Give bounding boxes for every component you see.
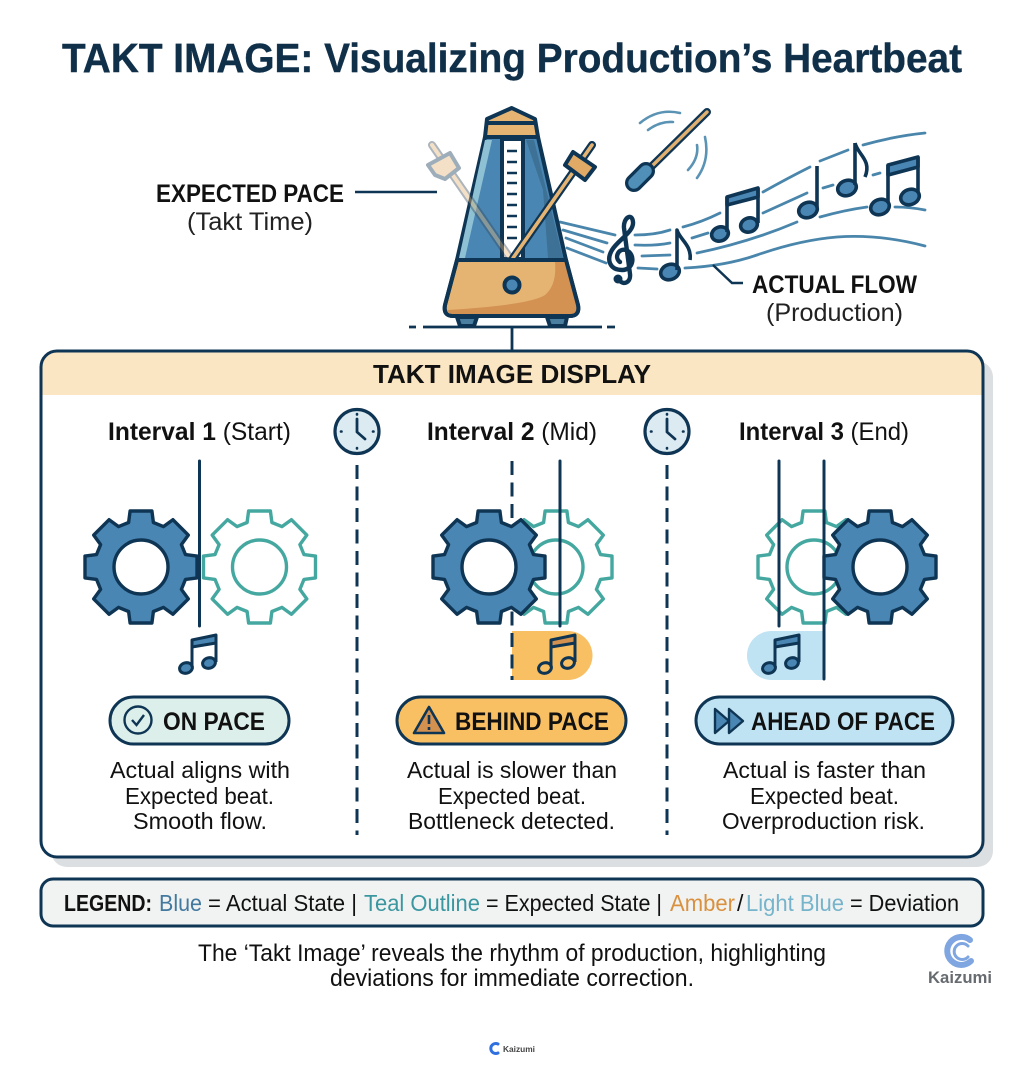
legend: Light Blue [746, 890, 844, 916]
description: Overproduction risk. [722, 808, 925, 834]
description [110, 757, 290, 834]
metronome base [445, 260, 578, 316]
deviation tab [512, 631, 592, 680]
metronome body [457, 137, 566, 260]
caption: deviations for immediate correction. [330, 965, 694, 992]
actual gear [824, 511, 936, 623]
metronome cap [485, 108, 538, 137]
description: Expected beat. [125, 783, 274, 809]
description: Smooth flow. [133, 808, 267, 834]
title: TAKT IMAGE: Visualizing Production’s Heartbeat [62, 35, 962, 81]
logo: Kaizumi watermark: Kaizumi [928, 968, 992, 987]
icon: conductor baton [634, 112, 707, 183]
heading: Interval 3 (End) [739, 418, 909, 446]
label: actual flow: ACTUAL FLOW [752, 271, 917, 299]
column: interval 1 [85, 418, 316, 834]
divider 1 with clock [335, 410, 379, 835]
description: Actual is slower than [407, 757, 617, 783]
label: expected pace: (Takt Time) [187, 208, 313, 236]
note 1 [659, 230, 690, 282]
actual gear [433, 511, 545, 623]
logo: Kaizumi footer: Kaizumi [503, 1044, 535, 1054]
metronome scale [502, 139, 523, 259]
column: interval 3 [696, 418, 953, 834]
divider 2 with clock [645, 410, 689, 835]
beat lines [779, 461, 824, 679]
logo: Kaizumi watermark [928, 937, 992, 987]
panel: takt image display [41, 351, 993, 867]
staff lines: actual flow wave [560, 133, 925, 269]
column: interval 2 [397, 418, 626, 834]
status pill [110, 697, 289, 744]
beat line [558, 461, 562, 626]
description: Actual is faster than [723, 757, 926, 783]
icon: metronome [428, 108, 595, 326]
label: actual flow: (Production) [766, 299, 903, 327]
heading: Interval 2 (Mid) [427, 418, 597, 446]
legend: Teal Outline [364, 890, 480, 916]
legend: = Deviation [850, 890, 959, 916]
note [178, 635, 217, 675]
description [407, 757, 617, 834]
note 4 [836, 143, 867, 198]
expected gear [758, 511, 870, 623]
panel header: TAKT IMAGE DISPLAY [373, 359, 651, 389]
ground line [409, 327, 615, 351]
note 2 [710, 188, 759, 243]
expected gear [500, 511, 612, 623]
description: Expected beat. [438, 783, 586, 809]
legend: Blue [159, 890, 202, 916]
ghost pendulum: expected position [428, 145, 510, 258]
status pill: AHEAD OF PACE [751, 708, 935, 736]
legend: Amber [670, 890, 735, 916]
status pill [696, 697, 953, 744]
description [722, 757, 926, 834]
label: actual flow [713, 265, 917, 327]
status pill [397, 697, 626, 744]
label: expected pace: EXPECTED PACE [156, 180, 344, 208]
status pill: ON PACE [163, 708, 265, 736]
expected beat dashed line [510, 461, 514, 680]
pendulum [513, 145, 595, 258]
logo: Kaizumi footer [491, 1044, 535, 1054]
panel header [41, 351, 983, 395]
actual gear [85, 511, 197, 623]
note [761, 635, 800, 675]
legend: = Expected State | [486, 890, 662, 916]
deviation tab [747, 631, 824, 680]
caption: The ‘Takt Image’ reveals the rhythm of production, highlighting [198, 940, 826, 967]
label: expected pace [156, 180, 437, 236]
metronome feet [457, 317, 567, 326]
expected gear [204, 511, 316, 623]
icons: music notes on the wave [659, 143, 921, 282]
status pill: BEHIND PACE [455, 708, 609, 736]
note 3 [797, 166, 819, 220]
description: Actual aligns with [110, 757, 290, 783]
icon: treble clef [609, 217, 633, 284]
legend [41, 879, 983, 926]
heading: Interval 1 (Start) [108, 418, 291, 446]
note [537, 635, 576, 675]
caption [198, 940, 826, 992]
description: Expected beat. [750, 783, 899, 809]
note 5 [869, 157, 921, 217]
beat line [198, 461, 201, 626]
legend: = Actual State | [208, 890, 357, 916]
legend: / [737, 890, 744, 916]
legend: LEGEND: [64, 890, 152, 916]
description: Bottleneck detected. [408, 808, 615, 834]
